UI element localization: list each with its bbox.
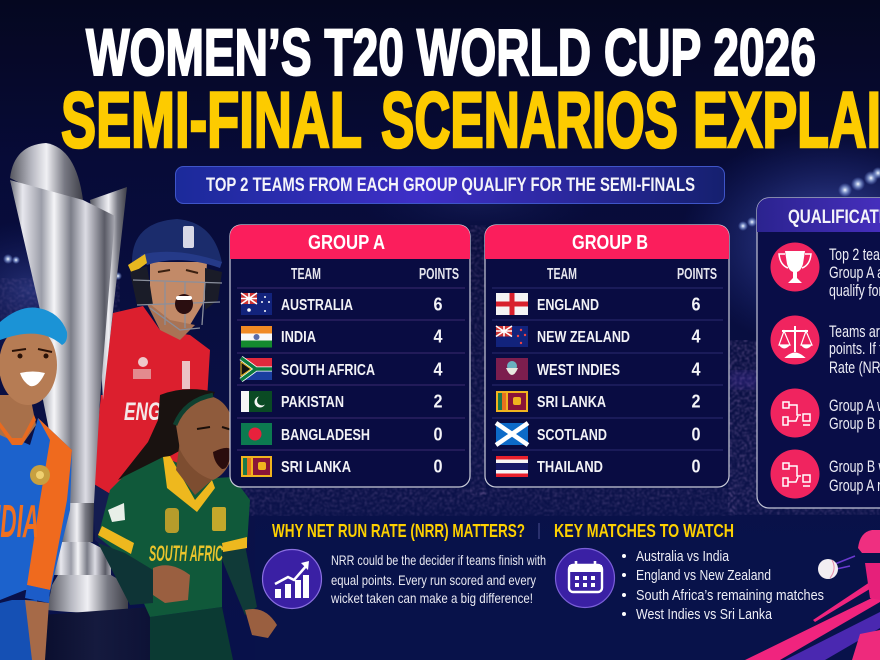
table header: Group A: [291, 268, 459, 279]
panel: qualification rules: [757, 198, 880, 508]
title line 2: SCENARIOS: [381, 75, 678, 164]
icon: scales: [770, 316, 820, 364]
row: England: [496, 293, 700, 315]
illustration: trophy: [10, 143, 128, 612]
text: rule 1: [829, 246, 880, 301]
text: rule 4: [829, 458, 880, 496]
illustration: England player: ENGL: [124, 398, 172, 426]
text: NRR explanation: wicket taken can make a big difference!: [330, 590, 533, 606]
heading: Group B: GROUP B: [572, 231, 648, 254]
table header: Group B: POINTS: [677, 266, 717, 283]
text: NRR explanation: NRR could be the decider if teams finish with: [331, 552, 546, 568]
row: West Indies: 4: [692, 360, 700, 380]
row: Sri Lanka: SRI LANKA: [281, 459, 351, 476]
row: Pakistan: 2: [434, 392, 442, 412]
icon: bracket: [770, 388, 820, 438]
text: NRR explanation: equal points. Every run scored and every: [331, 572, 536, 588]
row: Thailand: 0: [692, 456, 700, 476]
row: Australia: 6: [434, 294, 442, 314]
row: Pakistan: [241, 391, 442, 412]
row: South Africa: 4: [434, 360, 442, 380]
row: New Zealand: NEW ZEALAND: [537, 329, 630, 346]
table header: Group A: POINTS: [419, 266, 459, 283]
row: New Zealand: 4: [692, 326, 700, 346]
icon: bracket: [770, 450, 820, 498]
row: Bangladesh: BANGLADESH: [281, 427, 370, 444]
title line 2: SEMI-FINAL: [61, 75, 362, 164]
table header: Group B: TEAM: [547, 266, 577, 283]
text: rule 2: [829, 323, 880, 378]
plinth: [42, 607, 150, 660]
subtitle pill: [176, 166, 724, 204]
icon: trophy: [770, 242, 820, 292]
list: key matches: [622, 548, 824, 623]
row: Sri Lanka: SRI LANKA: [537, 394, 606, 411]
row: Sri Lanka: 2: [692, 392, 700, 412]
row: Sri Lanka: [496, 391, 700, 412]
list: key matches: South Africa’s remaining matches: [636, 587, 824, 604]
row: India: 4: [434, 326, 442, 346]
row: England: ENGLAND: [537, 297, 599, 314]
row: Pakistan: PAKISTAN: [281, 394, 344, 411]
row: South Africa: SOUTH AFRICA: [281, 362, 375, 379]
text: NRR explanation: [330, 552, 546, 606]
panel: Group A: [230, 225, 470, 487]
illustration: South Africa player: SOUTH AFRIC: [149, 541, 224, 566]
row: India: INDIA: [281, 329, 316, 346]
icon: calendar: [556, 548, 614, 608]
text: rule 3: [829, 397, 880, 434]
table header: Group A: TEAM: [291, 266, 321, 283]
row: West Indies: WEST INDIES: [537, 362, 620, 379]
row: West Indies: [496, 358, 700, 380]
row: Thailand: THAILAND: [537, 459, 603, 476]
row: Thailand: [496, 456, 700, 477]
row: India: [241, 326, 442, 348]
heading: why NRR matters: WHY NET RUN RATE (NRR) MATTERS?: [272, 521, 525, 541]
row: South Africa: [241, 358, 442, 380]
row: New Zealand: [496, 326, 700, 347]
illustration: England player: [92, 219, 222, 560]
list: key matches: Australia vs India: [636, 548, 730, 565]
row: England: 6: [692, 294, 700, 314]
panel: Group B: [485, 225, 729, 487]
title line 2: [62, 90, 878, 150]
row: Sri Lanka: [241, 456, 442, 477]
row: Bangladesh: 0: [434, 424, 442, 444]
row: Australia: AUSTRALIA: [281, 297, 353, 314]
row: Sri Lanka: 0: [434, 456, 442, 476]
subtitle pill: TOP 2 TEAMS FROM EACH GROUP QUALIFY FOR THE SEMI-FINALS: [206, 175, 695, 196]
heading: key matches: KEY MATCHES TO WATCH: [554, 521, 734, 541]
heading: Group A: GROUP A: [308, 231, 385, 254]
ball: [818, 556, 855, 579]
row: Scotland: [496, 423, 700, 445]
row: Scotland: SCOTLAND: [537, 427, 607, 444]
row: Bangladesh: [241, 423, 442, 445]
row: Australia: [241, 293, 442, 315]
row: Scotland: 0: [692, 424, 700, 444]
list: key matches: West Indies vs Sri Lanka: [636, 606, 773, 623]
icon: rising chart: [262, 550, 322, 608]
illustration: India player: [0, 308, 72, 660]
table header: Group B: [547, 268, 717, 279]
illustration: South Africa player: [98, 389, 277, 660]
list: key matches: England vs New Zealand: [636, 567, 771, 584]
illustration: batter with brush strokes: [745, 530, 880, 660]
